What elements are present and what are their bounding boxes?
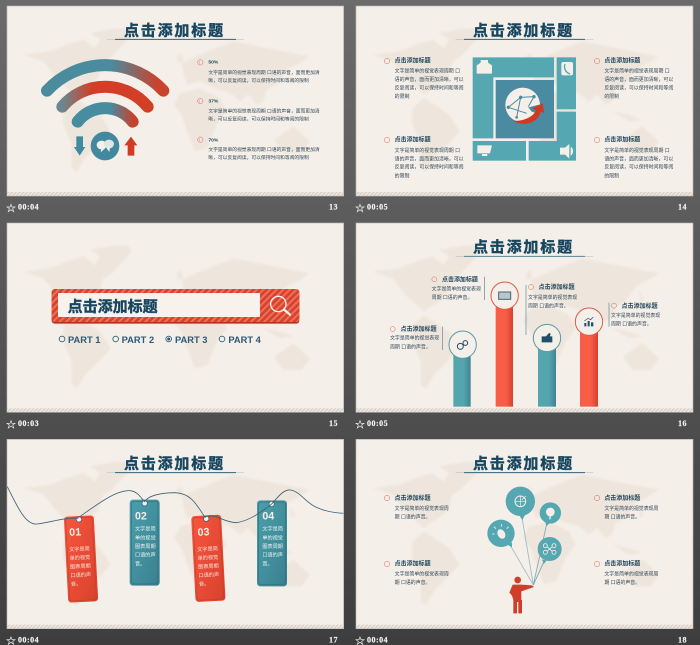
item bottom left: 期 口语的声音。 <box>395 579 430 586</box>
tag 04: 单的视觉 <box>262 533 283 541</box>
item bottom left: 文字是简单的视觉表现周期 口 <box>395 147 460 154</box>
label 3: 文字是简单的视觉表现 <box>528 294 577 301</box>
tag 03: 文字是简 <box>197 544 218 553</box>
label 4: 文字是简单的视觉表现 <box>611 312 660 319</box>
item bottom right <box>594 136 673 179</box>
part options: PART 2 <box>122 335 154 345</box>
tag 02 <box>130 500 160 586</box>
tag 02: 文字是简 <box>135 525 156 533</box>
icon: down arrow <box>74 136 85 156</box>
item 50%: 文字是简单的视觉表现周期 口语的声音，面而更加清 <box>208 69 320 76</box>
footer: 13 <box>329 203 338 212</box>
label 3: 点击添加标题 <box>539 283 575 291</box>
tag 04 <box>257 500 287 586</box>
item top left <box>384 57 464 100</box>
balloon: bulb <box>487 520 515 547</box>
item bottom right: 点击添加标题 <box>604 560 640 568</box>
item 37%: 文字是简单的视觉表现周期 口语的声音，面而更加清 <box>208 107 320 114</box>
label 2: 文字是简单的视觉表现 <box>432 285 481 292</box>
label 3: 周期 口语的声音。 <box>528 302 569 309</box>
footer <box>356 635 687 644</box>
label 1: 文字是简单的视觉表现 <box>390 335 439 342</box>
balloon: tree <box>540 502 561 526</box>
footer <box>7 419 338 428</box>
item bottom right: 点击添加标题 <box>604 136 640 144</box>
footer <box>356 419 687 428</box>
item top right <box>594 494 659 520</box>
string <box>7 487 343 524</box>
icon: monitor <box>477 145 492 156</box>
part options <box>59 335 262 345</box>
label 4: 周期 口语的声音。 <box>611 320 652 327</box>
item top right: 文字是简单的视觉表现周期 口 <box>604 68 670 75</box>
tag 03: 单的视觉 <box>197 553 218 562</box>
item bottom left: 反复阅读，可以保持时间和等阅 <box>395 164 464 171</box>
item bottom right: 的限制 <box>604 172 619 179</box>
tile grid <box>473 57 576 161</box>
item top right: 反复阅读，可以保持时间和等阅 <box>604 85 673 92</box>
part options: PART 3 <box>175 335 207 345</box>
item 37%: 37% <box>208 99 219 105</box>
footer: 14 <box>678 203 687 212</box>
wifi icon <box>47 65 163 122</box>
item bottom left: 的限制 <box>395 172 410 179</box>
item 70%: i <box>199 137 200 142</box>
icon: speaker <box>560 144 573 159</box>
balloon: target <box>506 487 535 520</box>
item bottom right: 期 口语的声音。 <box>604 579 640 586</box>
item bottom right: 文字是简单的视觉表现周 <box>604 571 659 578</box>
tag 01: 文字是简 <box>69 544 90 553</box>
part options: PART 1 <box>68 335 100 345</box>
tag 01: 图表周期 <box>70 562 91 571</box>
tag 04: 文字是简 <box>262 525 283 533</box>
item 50%: 晰，可以反复阅读，可以保持时间和等阅的限制 <box>208 77 309 84</box>
strings <box>511 519 547 585</box>
item bottom left: 文字是简单的视觉表现周 <box>395 571 449 578</box>
label 1: 周期 口语的声音。 <box>390 344 431 351</box>
title: 点击添加标题 <box>473 238 574 256</box>
footer: 00:04 <box>367 635 388 644</box>
item 50%: 50% <box>208 60 219 66</box>
heading: 点击添加标题 <box>68 298 158 316</box>
item top right: 的限制 <box>604 93 619 100</box>
footer: 15 <box>329 419 338 428</box>
tag 01 <box>64 515 98 603</box>
label 1 <box>390 325 442 351</box>
item top left <box>384 494 449 520</box>
tag 02: 02 <box>135 510 147 522</box>
item 37% <box>198 98 320 123</box>
footer: 00:03 <box>18 419 39 428</box>
title: 点击添加标题 <box>473 455 574 473</box>
item top right: 点击添加标题 <box>604 57 640 65</box>
footer: 00:05 <box>367 203 388 212</box>
item top left: 的限制 <box>395 93 410 100</box>
item top right: 期 口语的声音。 <box>604 513 640 520</box>
balloon: nodes <box>538 537 562 564</box>
slide 18: balloons <box>356 439 693 644</box>
tag 02: 图表周期 <box>135 542 156 550</box>
bar 4 <box>575 308 603 407</box>
footer: 00:04 <box>18 203 39 212</box>
tag 03: 口语的声 <box>198 570 219 579</box>
item top left: 期 口语的声音。 <box>395 513 430 520</box>
item bottom right: 反复阅读，可以保持时间和等阅 <box>604 164 673 171</box>
item 50% <box>198 60 320 84</box>
item bottom left: 点击添加标题 <box>395 560 431 568</box>
label 1: 点击添加标题 <box>401 325 437 333</box>
tag 04: 图表周期 <box>262 542 283 550</box>
icon: phone <box>561 62 573 75</box>
bar 2 <box>491 282 518 407</box>
tag 03: 03 <box>197 526 210 539</box>
slide 14: tiles <box>356 6 693 212</box>
footer: 16 <box>678 419 687 428</box>
item top right: 点击添加标题 <box>604 494 640 502</box>
bar 1 <box>449 331 476 407</box>
footer <box>356 203 687 212</box>
label 2 <box>432 275 484 301</box>
footer: 00:04 <box>18 635 39 644</box>
item top right: 语的声音，面而更加清晰，可以 <box>604 76 673 83</box>
tag 04: 04 <box>262 510 274 522</box>
item 37%: 晰，可以反复阅读，可以保持时间和等阅的限制 <box>208 116 309 123</box>
title: 点击添加标题 <box>473 21 574 39</box>
item bottom right: 语的声音，面而更加清晰，可以 <box>604 155 673 162</box>
item 70%: 70% <box>208 137 219 143</box>
search bar <box>52 289 299 324</box>
item top left: 点击添加标题 <box>395 494 431 502</box>
slide 16: bars <box>356 223 693 428</box>
tag 02: 口语的声 <box>135 551 156 559</box>
title: 点击添加标题 <box>124 455 225 473</box>
item top left: 语的声音，面而更加清晰，可以 <box>395 76 464 83</box>
label 2: 点击添加标题 <box>442 275 478 283</box>
item 70% <box>198 137 320 161</box>
item bottom left: 点击添加标题 <box>395 136 431 144</box>
footer: 18 <box>678 635 687 644</box>
item bottom right: 文字是简单的视觉表现周期 口 <box>604 147 670 154</box>
item 50%: i <box>199 60 200 65</box>
tag 01: 单的视觉 <box>69 553 90 562</box>
footer <box>7 203 338 212</box>
tag 03: 音。 <box>199 579 210 588</box>
item top left: 文字是简单的视觉表现周期 口 <box>395 68 460 75</box>
footer <box>7 635 338 644</box>
label 2: 周期 口语的声音。 <box>432 294 472 301</box>
tag 01: 口语的声 <box>70 570 91 579</box>
tag 04: 口语的声 <box>262 551 283 559</box>
label 3 <box>526 283 577 335</box>
item bottom left <box>384 560 449 586</box>
slide 13: wifi <box>7 6 344 212</box>
item bottom left: 语的声音，面而更加清晰，可以 <box>395 155 464 162</box>
item top left: 点击添加标题 <box>395 57 431 65</box>
item top left: 反复阅读，可以保持时间和等阅 <box>395 85 464 92</box>
tag 03 <box>191 515 226 602</box>
slide 17: tags <box>7 439 344 644</box>
title: 点击添加标题 <box>124 21 225 39</box>
item top right: 文字是简单的视觉表现周 <box>604 505 659 512</box>
item 37%: i <box>199 98 200 103</box>
icon: person <box>509 577 534 613</box>
icon: speech bubbles <box>91 132 119 160</box>
item top left: 文字是简单的视觉表现周 <box>395 505 449 512</box>
tag 02: 音。 <box>135 559 145 567</box>
icon: magnifier <box>271 296 290 315</box>
icon: mail <box>477 60 492 74</box>
icon: up arrow <box>124 137 137 156</box>
slide 15: search bar <box>7 223 344 428</box>
label 4 <box>609 302 660 327</box>
item 70%: 文字是简单的视觉表现周期 口语的声音，面而更加清 <box>208 146 320 153</box>
item bottom left <box>384 136 464 179</box>
icon: globe <box>505 88 544 124</box>
footer: 00:05 <box>367 419 388 428</box>
tag 02: 单的视觉 <box>135 533 156 541</box>
tag 03: 图表周期 <box>198 561 219 571</box>
part options: PART 4 <box>228 335 262 345</box>
tag 01: 音。 <box>71 579 81 588</box>
item bottom right <box>594 560 659 586</box>
item top right <box>594 57 673 100</box>
tag 01: 01 <box>69 526 82 539</box>
tag 04: 音。 <box>262 559 273 567</box>
bar 3 <box>533 324 561 407</box>
item 70%: 晰，可以反复阅读，可以保持时间和等阅的限制 <box>208 154 309 161</box>
footer: 17 <box>329 635 338 644</box>
label 4: 点击添加标题 <box>622 302 658 310</box>
